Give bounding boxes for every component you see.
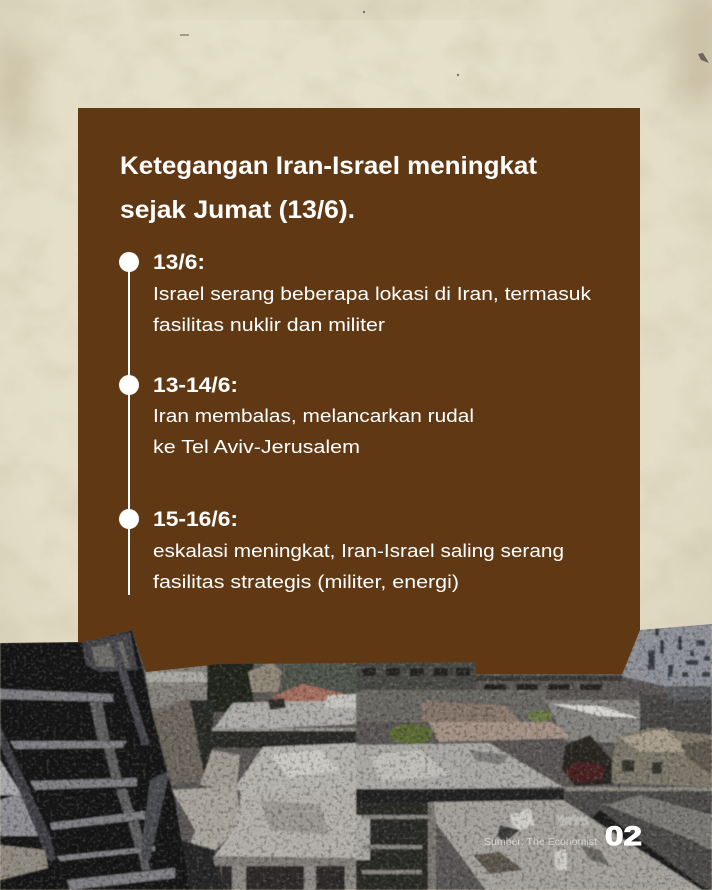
event marker: 13/6 <box>119 252 139 272</box>
right tower <box>622 624 712 700</box>
dark gap <box>190 700 214 780</box>
collapsed street <box>172 786 242 890</box>
event text: 13-14/6: Iran membalas, melancarkan rudal <box>153 405 474 426</box>
heading: sejak Jumat (13/6). <box>120 196 355 224</box>
event marker: 13-14/6 <box>119 375 139 395</box>
event text: 15-16/6: 15-16/6: <box>153 508 238 531</box>
brown text panel <box>78 108 640 678</box>
cracked roof in the foreground <box>434 800 702 890</box>
event text: 13-14/6: 13-14/6: <box>153 374 238 397</box>
heading: Ketegangan Iran-Israel meningkat <box>120 152 538 180</box>
lower-right debris <box>566 787 712 890</box>
photo grain <box>0 620 712 890</box>
photo: destroyed buildings <box>0 620 712 890</box>
left wall fragments <box>0 760 22 795</box>
event text: 13/6: fasilitas nuklir dan militer <box>153 314 385 335</box>
structure under centre roof <box>356 789 564 890</box>
event text: 13-14/6 <box>153 374 474 457</box>
rubble foreground building <box>213 790 356 890</box>
event text: 13-14/6: ke Tel Aviv-Jerusalem <box>153 436 360 457</box>
heading <box>120 152 538 224</box>
timeline <box>119 251 592 595</box>
building with flat roof <box>212 694 356 748</box>
tan building on the right <box>609 728 712 787</box>
event text: 15-16/6: fasilitas strategis (militer, energi) <box>153 571 459 592</box>
columns <box>90 702 150 870</box>
pink roof and greenery <box>389 700 571 744</box>
large centre roof <box>356 743 563 790</box>
rubble roof <box>200 743 356 790</box>
event text: 13/6: 13/6: <box>153 251 205 274</box>
mid-left apartment <box>148 698 205 785</box>
dark-red shrubs <box>562 735 612 786</box>
source credit: Sumber: The Economist <box>484 836 597 848</box>
event text: 13/6: Israel serang beberapa lokasi di Iran, termasuk <box>153 283 592 304</box>
event text: 13/6 <box>153 251 592 335</box>
page number: 02 <box>605 821 642 851</box>
event marker: 15-16/6 <box>119 509 139 529</box>
distant buildings <box>146 660 712 745</box>
event text: 15-16/6 <box>153 508 564 592</box>
event text: 15-16/6: eskalasi meningkat, Iran-Israel saling serang <box>153 540 564 561</box>
floor slabs <box>0 689 175 890</box>
left ruined building <box>0 630 190 890</box>
